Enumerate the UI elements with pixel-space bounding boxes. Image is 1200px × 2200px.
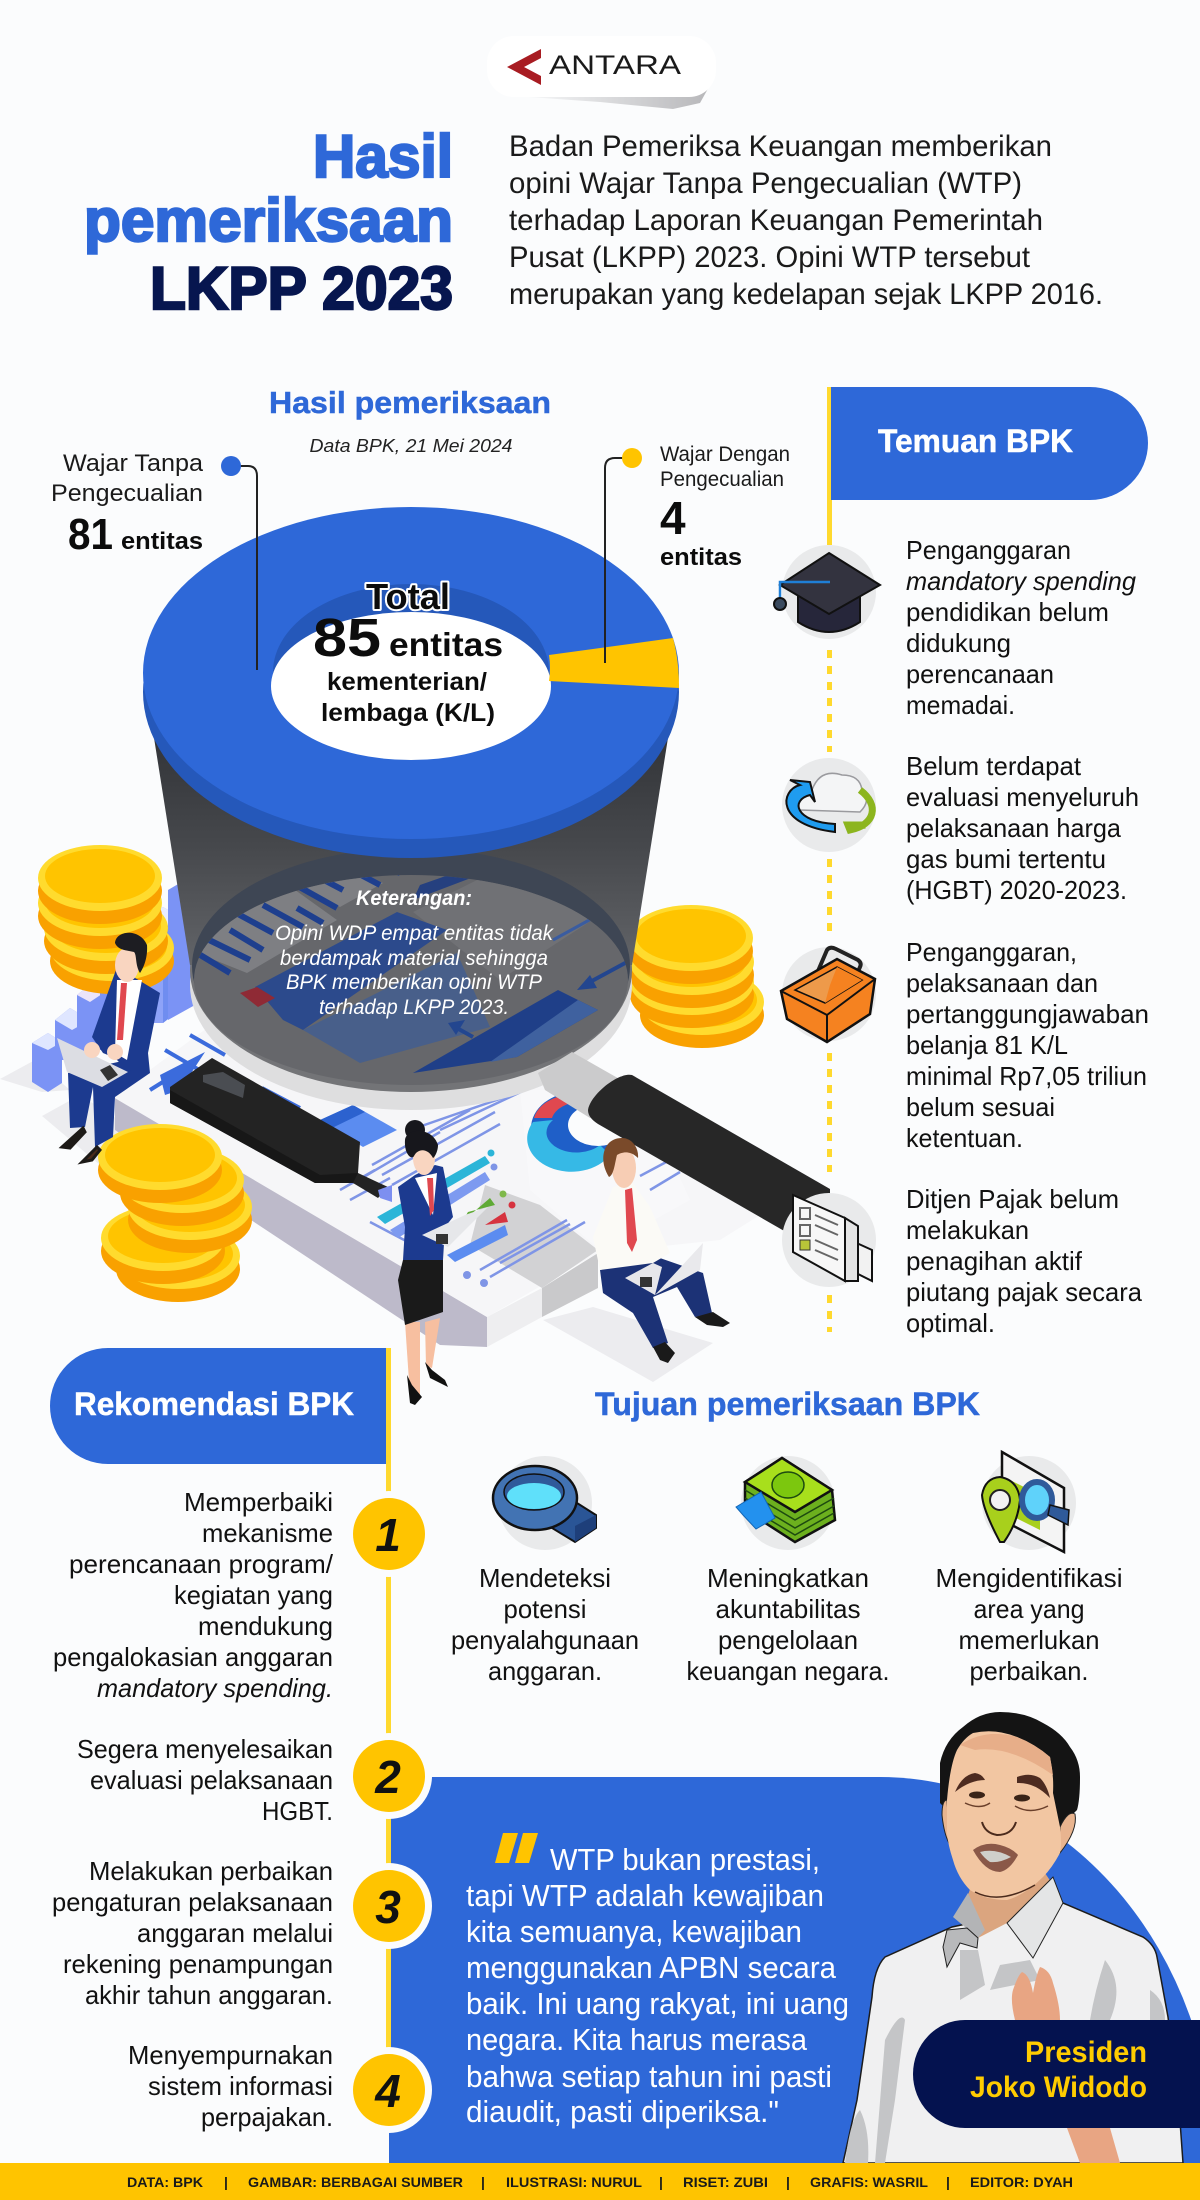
finding 2 text: [906, 751, 1139, 905]
panel: Rekomendasi BPK: [50, 1348, 432, 2133]
finding 2 text: gas bumi tertentu: [906, 844, 1106, 874]
footer credits bar: GRAFIS: WASRIL: [810, 2174, 928, 2190]
finding 1 text: perencanaan: [906, 659, 1054, 689]
total label: entitas: [389, 626, 503, 663]
heading: Tujuan pemeriksaan BPK: [595, 1386, 980, 1422]
footer credits bar: |: [659, 2174, 663, 2190]
timeline spine: [827, 387, 832, 1332]
recommendation 3 text: akhir tahun anggaran.: [85, 1980, 333, 2010]
cylinder column: [148, 700, 674, 965]
man with laptop, right: [593, 1138, 730, 1363]
finding 1 text: [906, 535, 1137, 720]
finding 2 text: Belum terdapat: [906, 751, 1082, 781]
finding 3 text: Penganggaran,: [906, 937, 1077, 967]
woman with tablet, centre: [398, 1120, 488, 1405]
recommendation 1 text: kegiatan yang: [174, 1580, 333, 1610]
recommendation 1 text: perencanaan program/: [69, 1549, 334, 1579]
name badge: [913, 2020, 1200, 2128]
footer credits bar: DATA: BPK: [127, 2174, 203, 2190]
finding 1 text: memadai.: [906, 690, 1015, 720]
finding 1 text: Penganggaran: [906, 535, 1071, 565]
finding 4 text: optimal.: [906, 1308, 995, 1338]
goal 2 text: [686, 1563, 890, 1686]
marker pen: [160, 1052, 392, 1202]
footer credits bar: ILUSTRASI: NURUL: [506, 2174, 642, 2190]
magnifier handle: [538, 1052, 830, 1232]
footer credits bar: |: [786, 2174, 790, 2190]
title: Hasil: [313, 123, 453, 190]
icon: basket: [781, 947, 876, 1042]
finding 3 text: belum sesuai: [906, 1092, 1055, 1122]
callout: Wajar Tanpa Pengecualian: Pengecualian: [51, 480, 203, 507]
goal 1 text: penyalahgunaan: [451, 1625, 639, 1655]
mouth: [973, 1844, 1018, 1872]
icon: map pin and magnifier: [982, 1452, 1076, 1552]
note: Keterangan: BPK memberikan opini WTP: [286, 971, 542, 994]
eyes: [969, 1792, 985, 1798]
recommendation 1 text: mekanisme: [202, 1518, 333, 1548]
badge 1: 1: [375, 1509, 401, 1561]
logo: ANTARA: [487, 36, 716, 109]
recommendation 4 text: sistem informasi: [148, 2071, 333, 2101]
recommendation 3 text: [52, 1856, 333, 2010]
badge 4: [346, 2047, 432, 2133]
total label: kementerian/: [327, 668, 487, 696]
logo: ANTARA: ANTARA: [549, 50, 681, 80]
paper stack platform: [113, 960, 800, 1347]
coins: top-left stack: [38, 845, 174, 994]
intro paragraph: Badan Pemeriksa Keuangan memberikan: [509, 130, 1052, 163]
quote text: bahwa setiap tahun ini pasti: [466, 2059, 832, 2094]
callout: Wajar Tanpa Pengecualian: entitas: [121, 528, 203, 555]
document lines and charts on paper: [150, 1035, 680, 1287]
header pill: [831, 387, 1148, 500]
shirt: [843, 1903, 1183, 2163]
quote text: tapi WTP adalah kewajiban: [466, 1878, 824, 1913]
footer credits bar: |: [946, 2174, 950, 2190]
note: Keterangan: berdampak material sehingga: [280, 947, 548, 970]
recommendation 4 text: [128, 2040, 333, 2132]
collar: [953, 1893, 985, 1938]
recommendation 1 text: mandatory spending.: [97, 1673, 333, 1703]
finding 1 text: mandatory spending: [906, 566, 1137, 596]
callout: Wajar Dengan Pengecualian: entitas: [660, 544, 742, 571]
name badge: Presiden: [1025, 2036, 1147, 2069]
recommendation 3 text: Melakukan perbaikan: [89, 1856, 333, 1886]
footer credits bar: RISET: ZUBI: [683, 2174, 768, 2190]
finding 3 text: ketentuan.: [906, 1123, 1023, 1153]
intro paragraph: merupakan yang kedelapan sejak LKPP 2016.: [509, 278, 1103, 311]
hair: [940, 1712, 1080, 1827]
footer credits bar: [0, 2163, 1200, 2200]
total label: Total: [366, 576, 450, 617]
icon: magnifier: [493, 1456, 596, 1550]
goal 3 text: [936, 1563, 1122, 1686]
recommendation 3 text: anggaran melalui: [137, 1918, 333, 1948]
footer credits bar: GAMBAR: BERBAGAI SUMBER: [248, 2174, 463, 2190]
note: Keterangan: Opini WDP empat entitas tidak: [275, 922, 554, 945]
goal 2 text: keuangan negara.: [686, 1656, 890, 1686]
recommendation 1 text: [53, 1487, 334, 1703]
header label: Rekomendasi BPK: [74, 1386, 354, 1422]
recommendation 2 text: [77, 1734, 333, 1826]
finding 4 text: piutang pajak secara: [906, 1277, 1143, 1307]
quote text: menggunakan APBN secara: [466, 1950, 837, 1985]
recommendation 2 text: evaluasi pelaksanaan: [90, 1765, 333, 1795]
icon: documents: [782, 1193, 876, 1287]
badge 3: 3: [375, 1881, 401, 1933]
recommendation 4 text: perpajakan.: [201, 2102, 333, 2132]
donut chart: 85 entitas: [143, 507, 679, 858]
callout: Wajar Tanpa Pengecualian: Wajar Tanpa: [63, 450, 204, 477]
footer credits bar: |: [481, 2174, 485, 2190]
icon: cloud cycle: [782, 758, 876, 852]
quote text: negara. Kita harus merasa: [466, 2022, 808, 2057]
coins: right stack: [629, 905, 764, 1048]
total label: 85: [313, 608, 381, 668]
eyebrows: [955, 1773, 985, 1792]
finding 4 text: penagihan aktif: [906, 1246, 1083, 1276]
goal 2 text: Meningkatkan: [707, 1563, 869, 1593]
finding 2 text: (HGBT) 2020-2023.: [906, 875, 1127, 905]
header label: Temuan BPK: [878, 423, 1073, 459]
finding 2 text: evaluasi menyeluruh: [906, 782, 1139, 812]
man with laptop, left: [57, 933, 160, 1162]
intro paragraph: [509, 130, 1103, 311]
finding 3 text: pertanggungjawaban: [906, 999, 1149, 1029]
finding 3 text: belanja 81 K/L: [906, 1030, 1068, 1060]
recommendation 1 text: mendukung: [198, 1611, 333, 1641]
goal 3 text: perbaikan.: [970, 1656, 1088, 1686]
finding 3 text: pelaksanaan dan: [906, 968, 1098, 998]
section heading: Hasil pemeriksaan: Hasil pemeriksaan: [269, 385, 551, 420]
quote text: baik. Ini uang rakyat, ini uang: [466, 1986, 849, 2021]
panel: Temuan BPK: [774, 387, 1149, 1338]
goal 3 text: Mengidentifikasi: [936, 1563, 1122, 1593]
magnifier glass with paper behind: [192, 848, 630, 1085]
forearm: [1067, 2128, 1120, 2163]
intro paragraph: Pusat (LKPP) 2023. Opini WTP tersebut: [509, 241, 1031, 274]
goal 3 text: memerlukan: [958, 1625, 1100, 1655]
goal 1 text: potensi: [504, 1594, 586, 1624]
title: LKPP 2023: [150, 255, 453, 322]
panel: quote from the President: [389, 1712, 1200, 2163]
badge 1: [346, 1491, 432, 1577]
recommendation 2 text: HGBT.: [262, 1796, 333, 1826]
floor shadows: [0, 1060, 713, 1382]
coins: bottom-left stack: [98, 1124, 252, 1302]
intro paragraph: opini Wajar Tanpa Pengecualian (WTP): [509, 167, 1022, 200]
finding 4 text: [906, 1184, 1143, 1338]
quote background: [389, 1777, 1200, 2163]
finding 1 text: pendidikan belum: [906, 597, 1109, 627]
callout: Wajar Dengan Pengecualian: Wajar Dengan: [660, 443, 790, 466]
yellow spine: [386, 1348, 391, 2088]
finding 1 text: didukung: [906, 628, 1011, 658]
icon: graduation cap: [774, 545, 880, 639]
callout: Wajar Tanpa Pengecualian: 81: [68, 510, 113, 559]
icon: money stack: [736, 1456, 835, 1550]
recommendation 1 text: Memperbaiki: [184, 1487, 333, 1517]
quote mark: [495, 1833, 538, 1863]
bar chart blocks: [32, 880, 204, 1092]
name badge: Joko Widodo: [970, 2071, 1147, 2104]
hand: [1012, 1967, 1060, 2020]
quote text: WTP bukan prestasi,: [550, 1842, 820, 1877]
goal 1 text: Mendeteksi: [479, 1563, 611, 1593]
note: Keterangan: [275, 887, 554, 1019]
total label: lembaga (K/L): [321, 699, 495, 727]
data source note: Data BPK, 21 Mei 2024: [310, 436, 512, 456]
goal 3 text: area yang: [974, 1594, 1084, 1624]
magnifier lens base: [190, 848, 632, 1110]
badge 4: 4: [374, 2065, 401, 2117]
total label: [313, 576, 503, 727]
finding 2 text: pelaksanaan harga: [906, 813, 1122, 843]
title: pemeriksaan: [84, 187, 453, 254]
quote text: diaudit, pasti diperiksa.": [466, 2094, 779, 2129]
goal 2 text: akuntabilitas: [716, 1594, 860, 1624]
isometric illustration: [0, 700, 830, 1405]
finding 3 text: [906, 937, 1149, 1153]
header pill: [50, 1348, 386, 1464]
goal 1 text: anggaran.: [488, 1656, 602, 1686]
recommendation 1 text: pengalokasian anggaran: [53, 1642, 333, 1672]
badge 3: [346, 1863, 432, 1949]
intro paragraph: terhadap Laporan Keuangan Pemerintah: [509, 204, 1043, 237]
title: [84, 123, 453, 322]
badge 2: [346, 1733, 432, 1819]
finding 4 text: melakukan: [906, 1215, 1029, 1245]
footer credits bar: EDITOR: DYAH: [970, 2174, 1073, 2190]
ears and face: [942, 1800, 950, 1845]
recommendation 4 text: Menyempurnakan: [128, 2040, 333, 2070]
goal 2 text: pengelolaan: [718, 1625, 858, 1655]
note: Keterangan: Keterangan:: [356, 887, 472, 910]
donut chart printed on paper: [527, 1092, 628, 1172]
note: Keterangan: terhadap LKPP 2023.: [319, 996, 509, 1019]
callout: Wajar Tanpa Pengecualian: [51, 450, 257, 670]
yellow segment: [549, 638, 679, 688]
recommendation 3 text: rekening penampungan: [63, 1949, 333, 1979]
nose: [982, 1822, 1016, 1835]
neck: [968, 1870, 1053, 1938]
portrait: Joko Widodo: [843, 1712, 1183, 2163]
quote text: [466, 1842, 849, 2129]
recommendation 2 text: Segera menyelesaikan: [77, 1734, 333, 1764]
finding 4 text: Ditjen Pajak belum: [906, 1184, 1119, 1214]
footer credits bar: |: [224, 2174, 228, 2190]
finding 3 text: minimal Rp7,05 triliun: [906, 1061, 1147, 1091]
callout: Wajar Dengan Pengecualian: [605, 443, 790, 663]
recommendation 3 text: pengaturan pelaksanaan: [52, 1887, 333, 1917]
goal 1 text: [451, 1563, 639, 1686]
quote text: kita semuanya, kewajiban: [466, 1914, 802, 1949]
badge 2: 2: [374, 1751, 401, 1803]
callout: Wajar Dengan Pengecualian: 4: [660, 492, 686, 544]
panel: Tujuan pemeriksaan BPK: [451, 1386, 1122, 1686]
callout: Wajar Dengan Pengecualian: Pengecualian: [660, 468, 784, 491]
